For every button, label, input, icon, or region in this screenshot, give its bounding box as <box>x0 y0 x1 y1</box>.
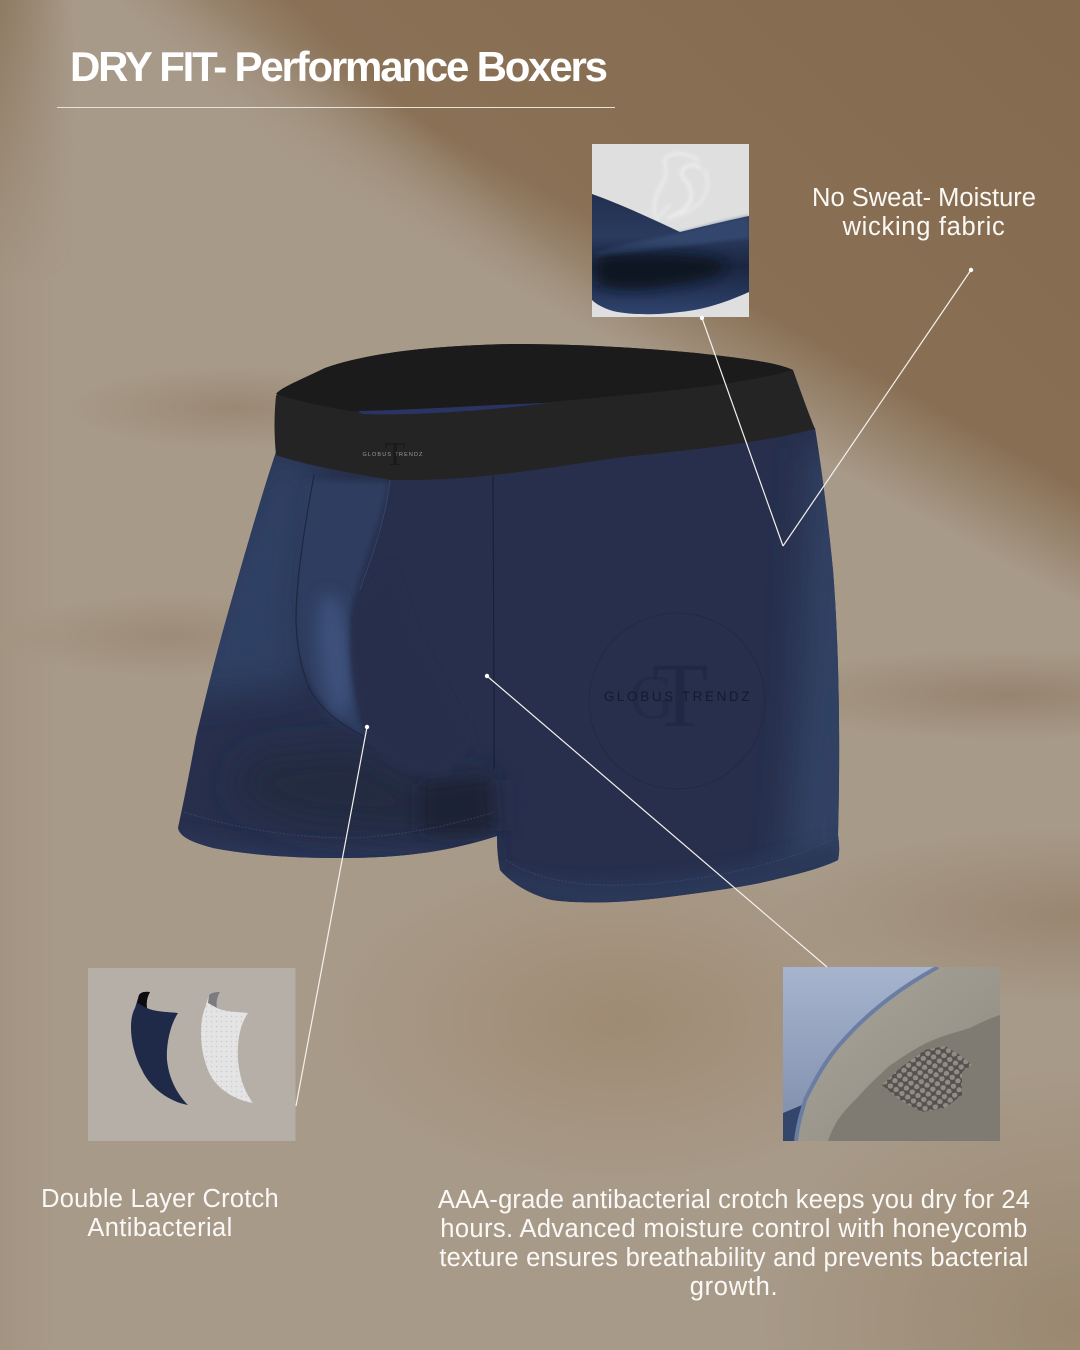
dark left leg under pouch <box>250 754 416 830</box>
boxer body <box>170 428 860 915</box>
background: brown strip top left <box>0 0 60 209</box>
photo: double layer crotch panels <box>88 968 296 1141</box>
text: antibacterial description: texture ensures breathability and prevents bacterial <box>439 1244 1029 1272</box>
white mesh panel <box>201 992 253 1103</box>
fabric watermark logo <box>589 613 765 789</box>
fabric watermark logo: G <box>630 664 674 732</box>
text: antibacterial description <box>438 1186 1030 1301</box>
title rule <box>57 106 615 108</box>
pouch body shadow edge <box>348 613 360 706</box>
waistband logo <box>363 436 423 473</box>
text: no sweat: wicking fabric <box>843 213 1005 241</box>
text: double layer crotch: Double Layer Crotch <box>41 1185 279 1213</box>
text: double layer crotch: Antibacterial <box>87 1214 233 1242</box>
pouch highlight strip <box>298 480 388 738</box>
photo panels and callout lines <box>57 107 1000 1141</box>
waistband logo: T <box>385 436 406 473</box>
text: double layer crotch <box>41 1185 279 1242</box>
fabric watermark logo: GLOBUS TRENDZ <box>604 689 752 704</box>
background: brown diagonal wedge top right <box>148 0 1080 588</box>
text: antibacterial description: hours. Advanced moisture control with honeycomb <box>440 1215 1028 1243</box>
text: antibacterial description: AAA-grade antibacterial crotch keeps you dry for 24 <box>438 1186 1030 1214</box>
callout: fabric photo to boxers <box>700 316 783 546</box>
callout: crotch seam to honeycomb photo <box>485 674 827 967</box>
title: DRY FIT- Performance Boxers <box>70 43 606 90</box>
fabric watermark logo: T <box>652 644 708 746</box>
fabric folds <box>592 194 749 314</box>
text: no sweat: No Sweat- Moisture <box>812 184 1036 212</box>
text: no sweat <box>812 184 1036 241</box>
callout: pouch to double layer photo <box>296 725 369 1106</box>
waistband <box>274 344 815 480</box>
photo: moisture wicking fabric with steam <box>592 144 749 317</box>
navy panel <box>131 992 188 1105</box>
text: antibacterial description: growth. <box>690 1273 778 1301</box>
product illustration: navy boxers with black waistband <box>178 344 840 902</box>
callout: sweat text to boxers <box>783 268 973 546</box>
waistband logo: GLOBUS TRENDZ <box>363 452 423 458</box>
seams <box>296 475 365 737</box>
right thigh shading <box>780 442 840 873</box>
photo: honeycomb antibacterial crotch <box>783 967 1000 1141</box>
hem light <box>503 848 839 902</box>
left hip panel <box>204 454 320 703</box>
